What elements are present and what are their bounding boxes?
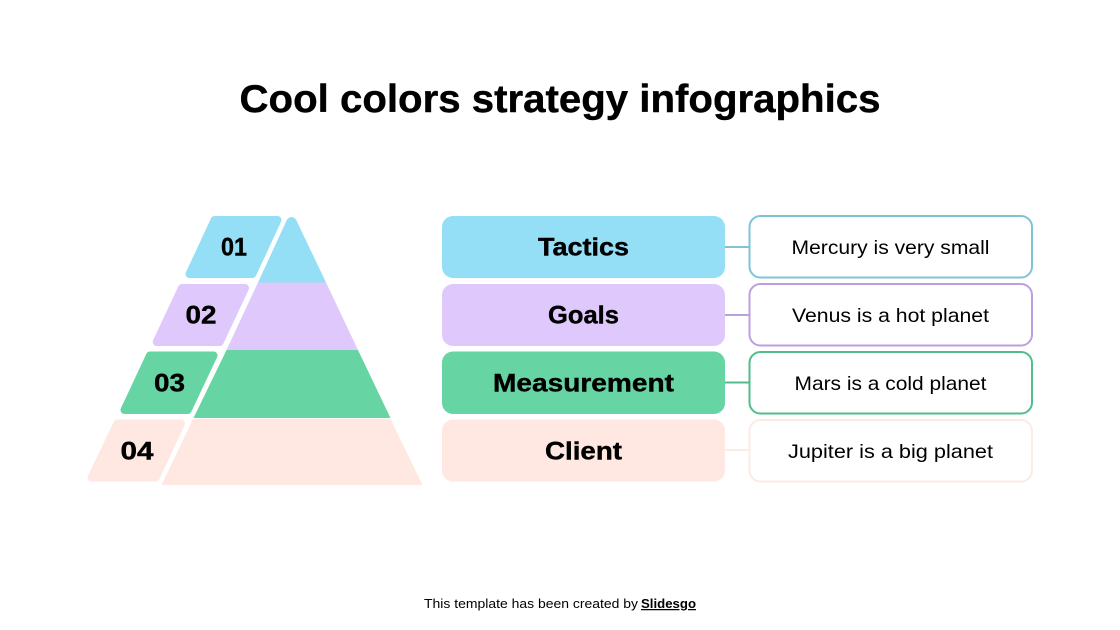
- label bar 4: [442, 420, 725, 482]
- number tab 03: 03: [154, 370, 185, 398]
- description 2: Venus is a hot planet: [792, 305, 990, 327]
- number tab 02: [157, 288, 245, 342]
- description box 3: [750, 352, 1032, 414]
- pyramid tier 2: purple: [226, 282, 358, 350]
- description box 4: [750, 420, 1032, 482]
- description 1: Mercury is very small: [792, 237, 990, 259]
- footer credit: This template has been created by: [424, 597, 639, 611]
- pyramid tier 3: green: [194, 350, 390, 418]
- description box 1: [750, 216, 1032, 278]
- connector 4: [725, 449, 749, 451]
- row 3: Measurement: [442, 352, 1032, 414]
- number tab 03: [124, 356, 214, 410]
- connector 2: [725, 314, 749, 316]
- number tab 04: 04: [120, 438, 154, 466]
- number tab 04: [92, 424, 181, 478]
- row 1: Tactics: [442, 216, 1032, 278]
- label 1: Tactics: [538, 234, 629, 262]
- label 3: Measurement: [493, 370, 675, 398]
- description 4: Jupiter is a big planet: [788, 441, 994, 463]
- description 3: Mars is a cold planet: [794, 373, 987, 395]
- pyramid tier 4: peach: [162, 419, 422, 485]
- label bar 2: [442, 284, 725, 346]
- connector 3: [725, 382, 749, 384]
- row 2: Goals: [442, 284, 1032, 346]
- pyramid tier 1: blue: [258, 217, 326, 282]
- number tab 01: 01: [221, 234, 247, 262]
- number tab 01: [190, 220, 278, 274]
- connector 1: [725, 246, 749, 248]
- footer credit: Slidesgo: [641, 597, 696, 611]
- label 2: Goals: [548, 302, 619, 330]
- pyramid: [162, 217, 422, 485]
- label bar 3: [442, 352, 725, 414]
- description box 2: [750, 284, 1032, 346]
- label 4: Client: [545, 438, 623, 466]
- label bar 1: [442, 216, 725, 278]
- title: Cool colors strategy infographics: [240, 78, 880, 121]
- number tab 02: 02: [186, 302, 216, 330]
- row 4: Client: [442, 420, 1032, 482]
